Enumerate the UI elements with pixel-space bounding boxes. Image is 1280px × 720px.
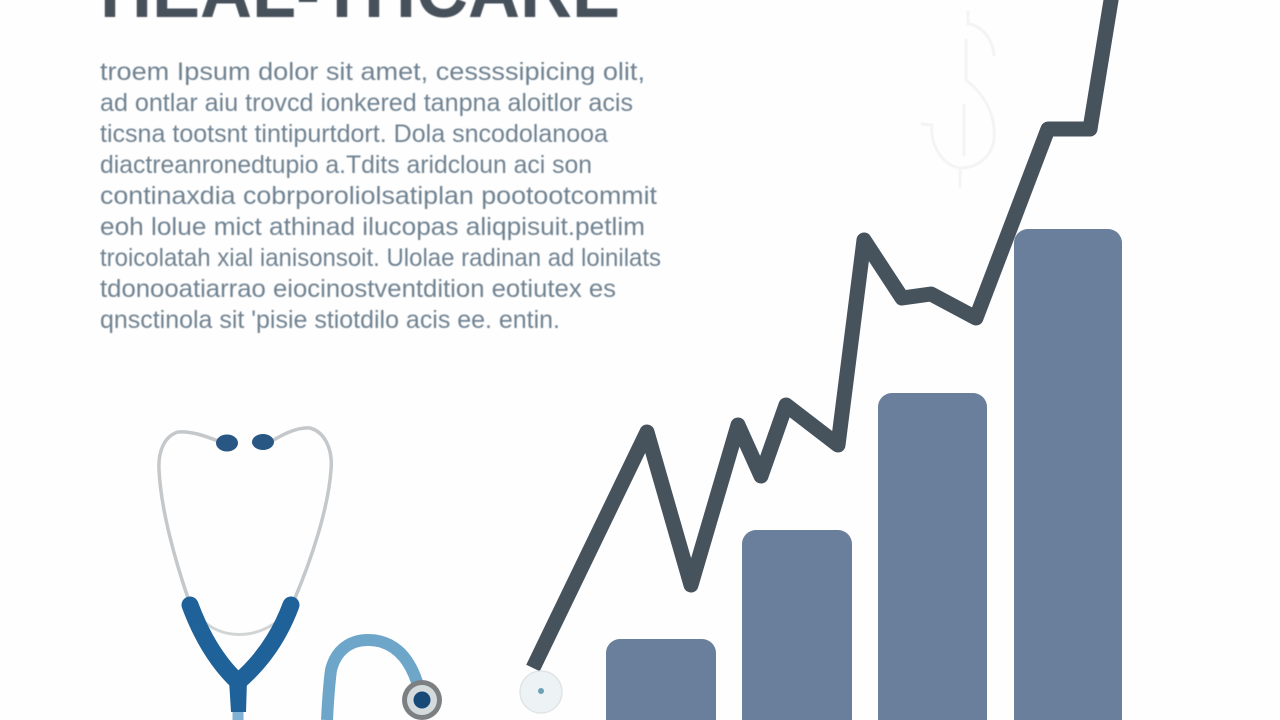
bar 1 bbox=[606, 639, 716, 720]
earpiece right bbox=[252, 434, 274, 450]
chest piece bbox=[402, 680, 442, 720]
earpiece left bbox=[216, 434, 238, 452]
body text block: diactreanronedtupio a.Tdits aridcloun aci son bbox=[100, 151, 592, 179]
bar 2 bbox=[742, 530, 852, 720]
light blue tube bbox=[327, 640, 417, 720]
body text block: troem Ipsum dolor sit amet, cessssipicing olit, bbox=[100, 58, 645, 86]
body text block bbox=[100, 58, 661, 334]
body text block: continaxdia cobrporoliolsatiplan pootootcommit bbox=[100, 182, 657, 210]
blue yoke bbox=[190, 605, 291, 682]
icon: stethoscope bbox=[159, 428, 442, 720]
body text block: ticsna tootsnt tintipurtdort. Dola sncodolanooa bbox=[100, 120, 608, 148]
bar 3 bbox=[878, 393, 987, 720]
bar 4 bbox=[1014, 229, 1122, 720]
tubing: lower loop bbox=[200, 618, 282, 634]
body text block: eoh lolue mict athinad ilucopas aliqpisuit.petlim bbox=[100, 213, 645, 241]
tubing: headset bbox=[159, 432, 218, 598]
bar chart bbox=[606, 229, 1122, 720]
icon: faint dollar sign bbox=[922, 12, 994, 186]
line start marker bbox=[520, 671, 562, 713]
body text block: qnsctinola sit 'pisie stiotdilo acis ee. entin. bbox=[100, 306, 560, 334]
body text block: tdonooatiarrao eiocinostventdition eotiutex es bbox=[100, 275, 616, 303]
rising line chart bbox=[533, 0, 1113, 668]
body text block: ad ontlar aiu trovcd ionkered tanpna aloitlor acis bbox=[100, 89, 633, 117]
body text block: troicolatah xial ianisonsoit. Ulolae radinan ad loinilats bbox=[100, 244, 661, 272]
